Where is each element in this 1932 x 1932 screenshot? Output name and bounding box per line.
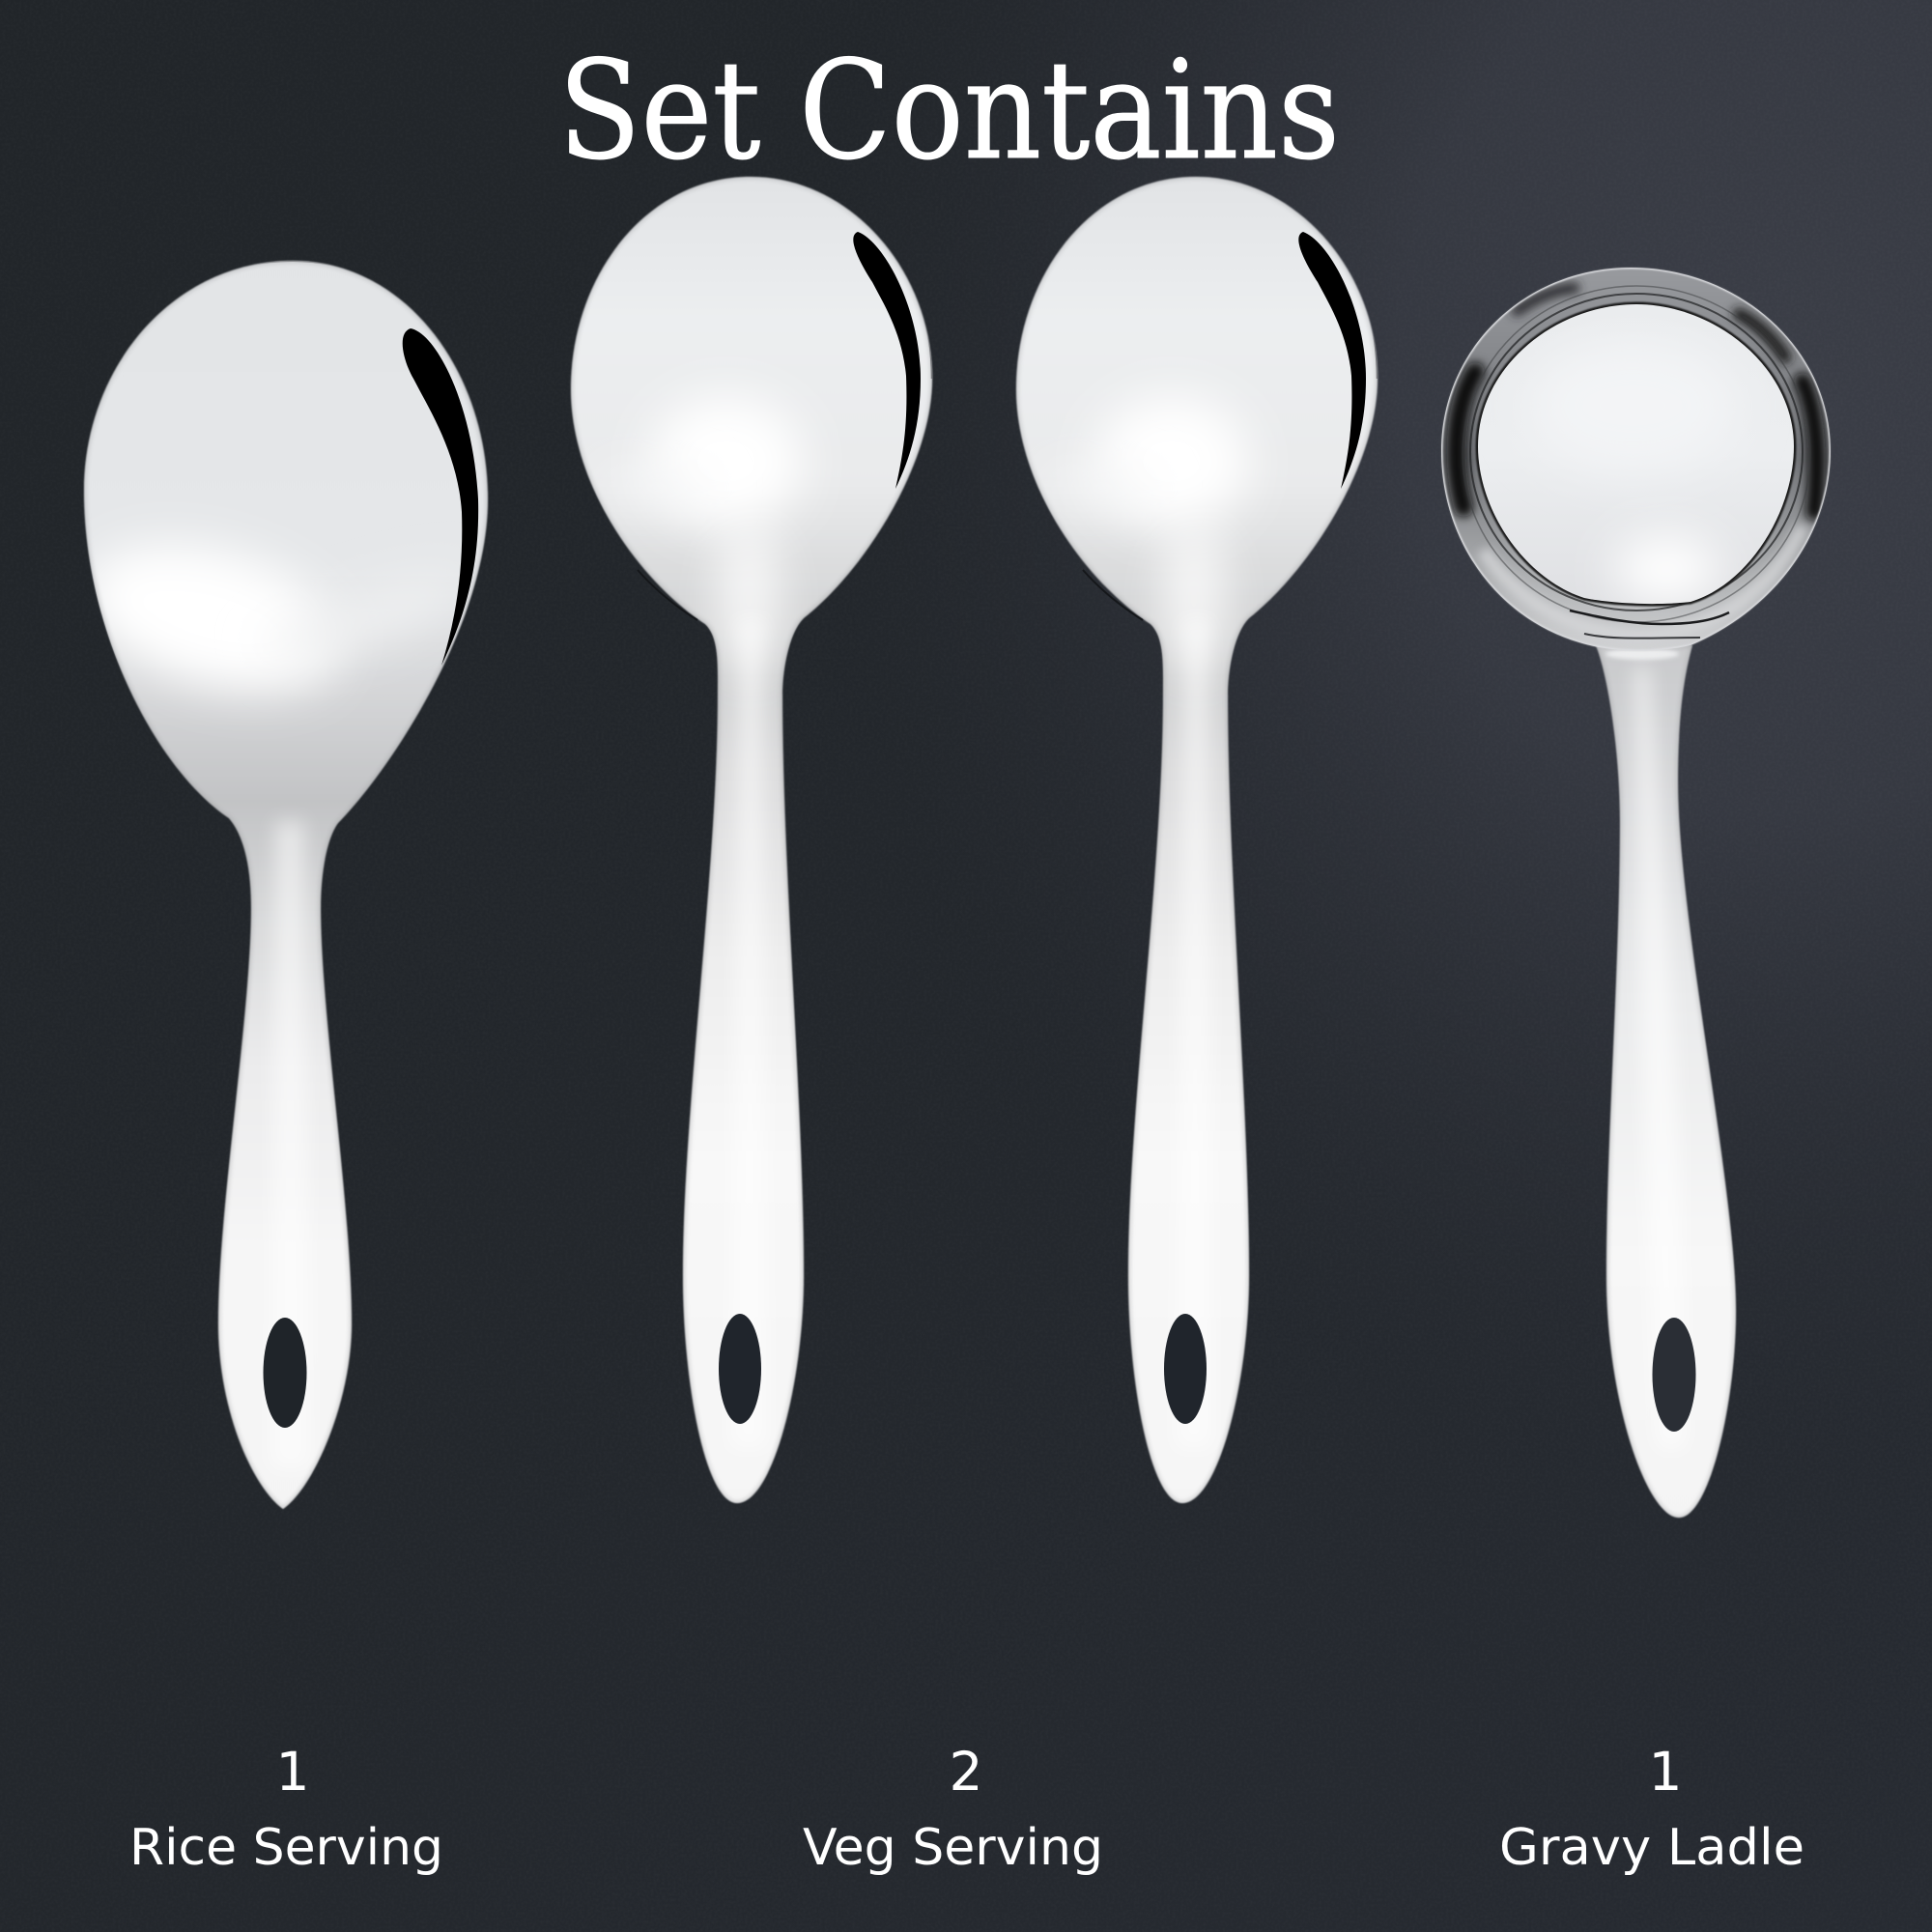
label: veg serving: 2 [949, 1741, 983, 1803]
label: rice serving: Rice Serving [129, 1819, 443, 1877]
label: rice serving [129, 1741, 443, 1877]
icon: gravy ladle [1441, 268, 1831, 1518]
ladle inner bowl [1478, 304, 1794, 605]
icon: veg serving spoon [571, 177, 932, 1503]
rice spoon hanging hole [263, 1318, 307, 1428]
title: Set Contains [558, 32, 1340, 190]
label: rice serving: 1 [276, 1741, 309, 1803]
label: gravy ladle: 1 [1648, 1741, 1683, 1803]
veg spoon hanging hole [719, 1314, 761, 1424]
label: veg serving: Veg Serving [803, 1819, 1103, 1877]
icon: second veg serving spoon [1016, 177, 1378, 1503]
icon: rice serving spoon [69, 261, 488, 1509]
ladle rim [1441, 268, 1831, 651]
label: gravy ladle [1499, 1741, 1804, 1877]
rice spoon reflection [403, 328, 478, 666]
label: veg serving [803, 1741, 1103, 1877]
label: gravy ladle: Gravy Ladle [1499, 1819, 1804, 1877]
veg spoon reflection [853, 232, 921, 489]
ladle hanging hole [1652, 1318, 1696, 1432]
ladle handle [1596, 645, 1736, 1518]
